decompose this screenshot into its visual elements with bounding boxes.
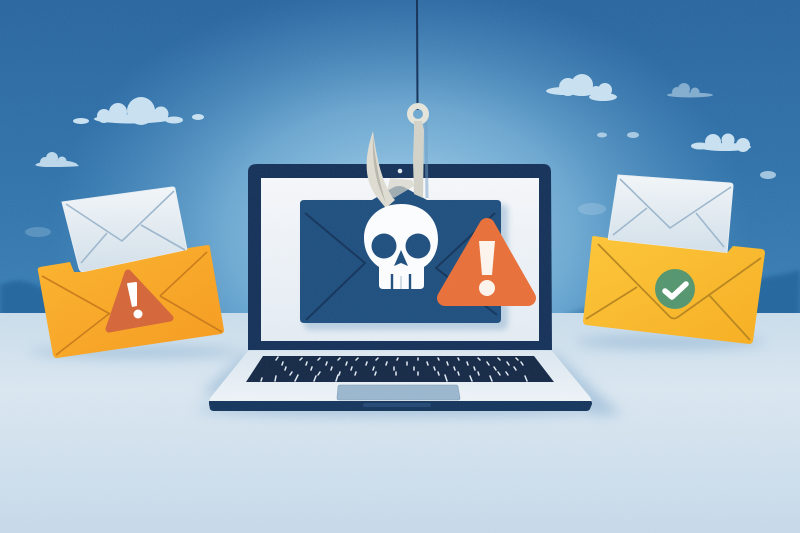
keyboard: [246, 356, 554, 382]
right envelope group: [583, 175, 765, 344]
fishing hook: [367, 106, 427, 208]
navy envelope on screen: [300, 186, 501, 323]
check badge: [655, 269, 695, 309]
cloud: upper right small: [667, 83, 713, 98]
laptop: [209, 164, 592, 411]
envelope shadow on screen: [304, 204, 508, 330]
hook shadow: [426, 122, 427, 198]
laptop base: [209, 351, 592, 411]
clouds: [25, 74, 776, 237]
cloud: lower left: [35, 152, 79, 167]
laptop lid: [248, 164, 552, 350]
fishing line: [416, 0, 418, 110]
warning triangle on screen: [445, 226, 528, 298]
skull icon: [364, 204, 438, 290]
yellow envelope: [583, 236, 765, 344]
cloud: mid right: [691, 134, 751, 152]
small cloud puffs: [597, 132, 776, 179]
cloud: upper left: [73, 97, 204, 125]
distant hills: [0, 270, 800, 318]
sky background: [0, 0, 800, 330]
white letter: [608, 175, 733, 253]
floor shadows: [30, 335, 765, 417]
trackpad: [337, 385, 460, 400]
left envelope group: [38, 187, 224, 358]
orange envelope: [38, 245, 224, 358]
white letter: [62, 187, 187, 272]
floor: [0, 313, 800, 533]
warning triangle: [109, 273, 170, 329]
cloud: upper right large: [546, 74, 617, 101]
